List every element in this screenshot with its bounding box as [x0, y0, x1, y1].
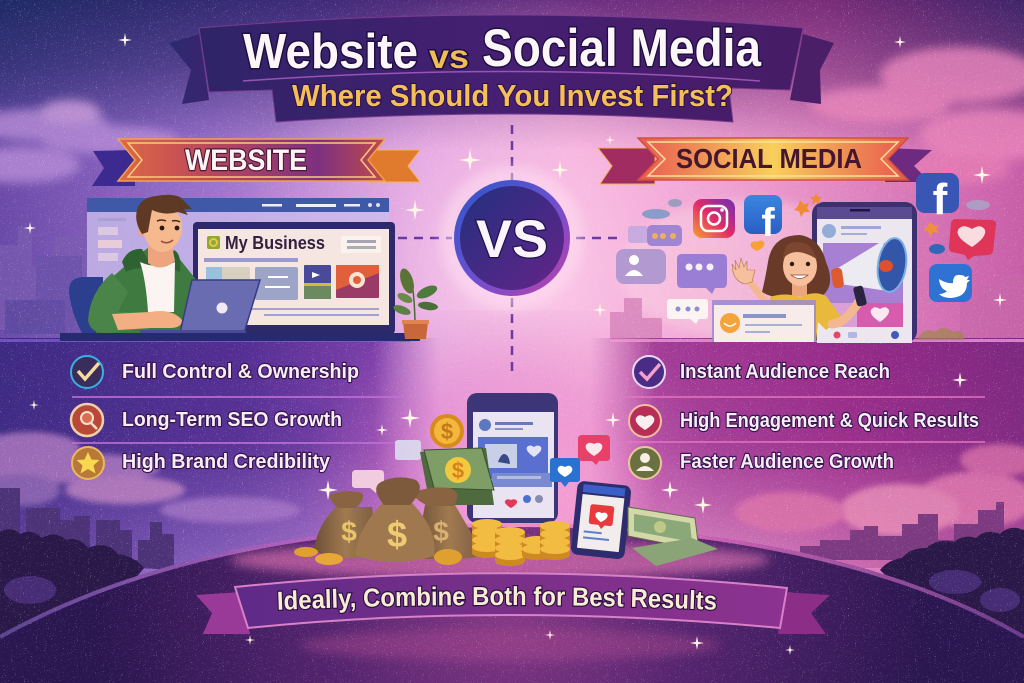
benefit: audience reach: [633, 356, 890, 388]
phone: [812, 202, 917, 343]
small phone: [570, 480, 632, 560]
VS badge: [440, 166, 584, 310]
title banner: [169, 15, 834, 122]
icon: facebook: f: [761, 201, 775, 245]
right benefit list: [625, 356, 985, 479]
raised hand: [732, 258, 755, 284]
my business heading: My Business: [225, 233, 325, 253]
benefit: audience growth: [629, 447, 894, 479]
gold coin stacks: [294, 519, 570, 566]
post card: [712, 300, 816, 342]
title text: Social Media: [482, 19, 761, 78]
person with megaphone: [732, 235, 910, 342]
skyline: bottom left: [0, 488, 174, 570]
clouds: upper left: [0, 100, 180, 183]
benefit: engagement: [629, 405, 979, 437]
icon: gold coin: [430, 414, 464, 448]
benefit: full control: [71, 356, 359, 388]
ribbon tail: right: [778, 592, 830, 634]
VS text: VS: [476, 210, 548, 269]
icon: heart bubble: [949, 219, 996, 260]
banner tail: right: [790, 34, 834, 104]
laptop: [180, 280, 260, 333]
cash stack: [420, 448, 494, 505]
chat tiles: [352, 440, 421, 493]
browser window behind: [87, 198, 389, 328]
bag right: $: [433, 516, 449, 547]
subtitle text: Where Should You Invest First?: [292, 78, 733, 113]
benefit: full control: Full Control & Ownership: [122, 361, 359, 383]
band top edge: [0, 339, 1024, 342]
desktop monitor: [193, 222, 395, 334]
skyline: bottom right: [800, 502, 1004, 560]
ribbon: website: [92, 139, 420, 186]
icon: facebook large: f: [933, 175, 948, 224]
t-shirt: [140, 262, 175, 312]
title text: [243, 19, 761, 79]
website tiles: [206, 265, 379, 300]
center dashed divider: [398, 125, 622, 375]
ribbon body: [235, 573, 787, 628]
bag left: [314, 491, 378, 558]
raised arm: [750, 282, 764, 300]
left benefit list: [71, 356, 402, 479]
clouds: lower right: [735, 444, 1024, 536]
hair: [136, 195, 192, 234]
title text: Website: [243, 25, 418, 79]
bottom ribbon text: Ideally, Combine Both for Best Results: [277, 585, 717, 614]
benefit: seo growth: Long-Term SEO Growth: [122, 409, 342, 431]
trees: bottom silhouettes: [0, 528, 1024, 660]
illustration: social media scene: [616, 173, 996, 343]
banner tail: left: [169, 34, 209, 104]
benefit: audience reach: Instant Audience Reach: [680, 361, 890, 383]
list dividers: [72, 396, 402, 444]
logo: [207, 236, 220, 249]
bills: [628, 507, 718, 566]
person: [88, 195, 260, 335]
benefit: audience growth: Faster Audience Growth: [680, 451, 894, 473]
illustration: money and phones: [294, 393, 718, 566]
bag left: $: [341, 516, 357, 547]
megaphone: [831, 236, 910, 307]
illustration: website scene: [60, 195, 439, 341]
bag middle: [356, 477, 435, 562]
bag right: [414, 488, 484, 560]
benefit: engagement: High Engagement & Quick Results: [680, 410, 979, 432]
icon: gold coin: $: [441, 419, 453, 444]
main phone: [467, 393, 558, 523]
panel band: left benefits: [0, 338, 440, 568]
stage: bottom ground: [0, 525, 1024, 683]
hoodie: [95, 248, 198, 333]
foliage highlights: [4, 570, 1020, 612]
icon: facebook large: [916, 173, 959, 224]
holding arm: [832, 300, 860, 324]
clouds: upper right: [810, 47, 1024, 186]
icon: facebook: [744, 195, 782, 245]
ribbon: social media: [598, 138, 932, 184]
neck: [792, 282, 807, 296]
small accents: [751, 193, 945, 254]
money bags: [314, 477, 484, 562]
heart bubble: blue: [550, 458, 580, 487]
hair: [762, 235, 830, 297]
list dividers: [625, 396, 985, 443]
benefit: seo growth: [71, 404, 342, 436]
clouds & chat bubbles: [616, 199, 990, 324]
desk: [60, 333, 420, 341]
ribbon label: WEBSITE: [185, 144, 307, 177]
cash stack: $: [452, 458, 464, 483]
clouds: lower left: [0, 432, 300, 523]
ribbon tail: left: [196, 592, 250, 634]
skyline: left: [0, 212, 86, 334]
benefit: brand credibility: High Brand Credibility: [122, 451, 331, 473]
bottom ribbon: [196, 572, 830, 634]
shirt: [770, 293, 842, 342]
ribbon label: SOCIAL MEDIA: [676, 143, 862, 174]
icon: twitter: [929, 264, 972, 302]
banner body: [199, 15, 803, 122]
title text: vs: [429, 38, 469, 75]
skyline: right: [610, 274, 1024, 340]
bag middle: $: [387, 514, 407, 555]
icon: instagram: [693, 199, 735, 238]
benefit: brand credibility: [72, 447, 331, 479]
heart bubble: red: [578, 435, 610, 465]
neck: [148, 246, 175, 268]
chair: [69, 277, 103, 333]
plant: [392, 267, 439, 339]
panel band: right benefits: [590, 338, 1024, 568]
face: [142, 208, 182, 252]
center glow: [290, 310, 734, 560]
face: [783, 246, 817, 286]
bushes: [917, 328, 965, 340]
arm: [88, 273, 152, 333]
